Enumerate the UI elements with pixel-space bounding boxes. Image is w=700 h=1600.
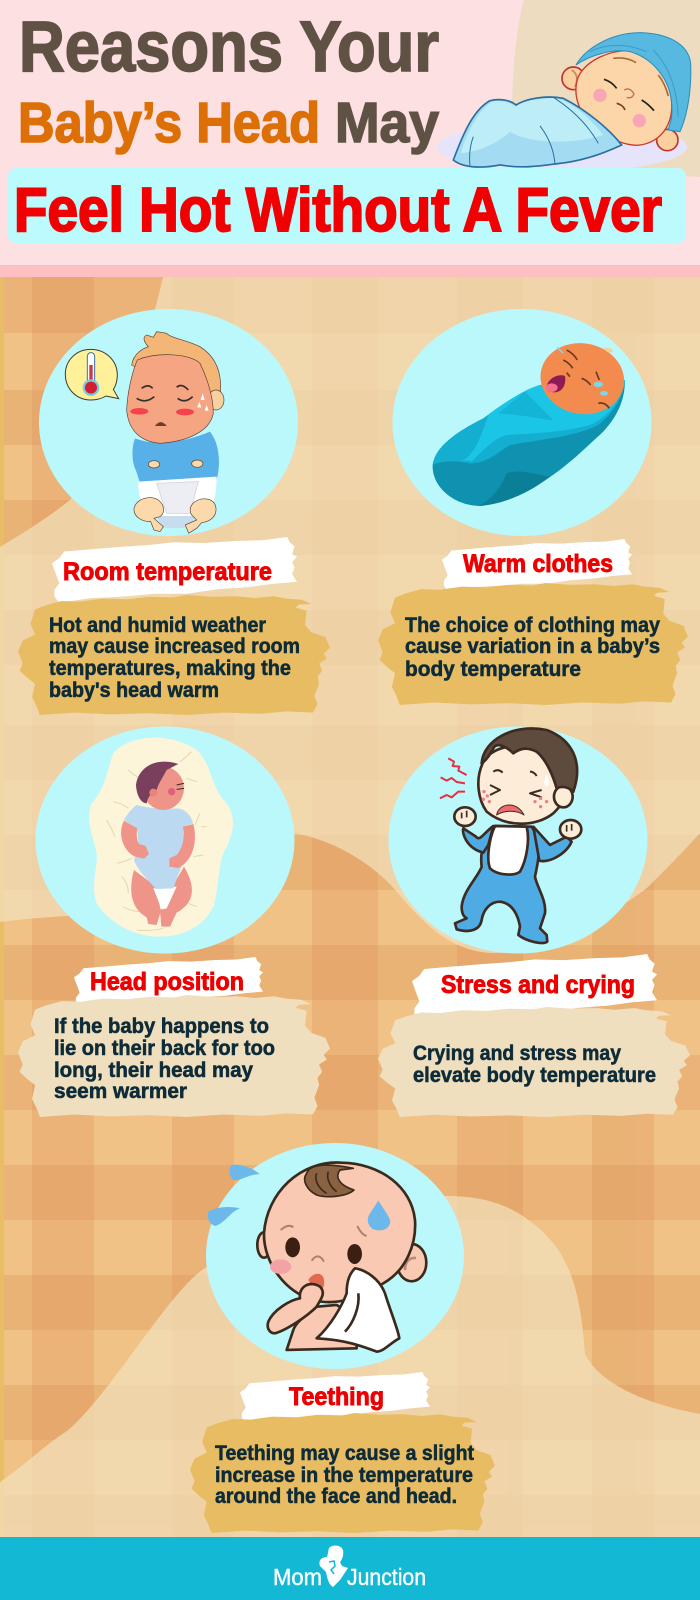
text block: warm clothes: cause variation in a baby’s	[405, 635, 660, 658]
text block: teething: Teething may cause a slight	[215, 1442, 474, 1465]
illustration: baby lying on back	[89, 738, 233, 937]
header background	[0, 0, 700, 277]
circle: stress and crying	[388, 726, 648, 954]
text block: room temperature: temperatures, making the	[49, 657, 291, 680]
illustration: overheated baby with thermometer	[65, 332, 224, 533]
text block: warm clothes	[378, 583, 688, 705]
title line: Reasons Your: Reasons Your	[19, 8, 439, 87]
circle: room temperature	[39, 309, 298, 536]
illustration: crying baby in blue sleepsuit	[440, 729, 581, 943]
title	[18, 8, 439, 155]
text block: head position: long, their head may	[54, 1059, 253, 1082]
circle: warm clothes	[392, 309, 652, 536]
heading: Stress and crying: Stress and crying	[441, 971, 635, 999]
heading: Stress and crying	[412, 954, 657, 1022]
text block: teething: increase in the temperature	[215, 1464, 473, 1487]
panel: room temperature	[18, 309, 330, 715]
heading: Room temperature: Room temperature	[63, 558, 272, 586]
circle: teething	[206, 1143, 464, 1369]
text block: room temperature: may cause increased room	[49, 635, 300, 658]
panel: head position	[18, 726, 330, 1117]
heading: Warm clothes: Warm clothes	[463, 550, 613, 578]
text block: room temperature	[18, 595, 330, 715]
text block: stress and crying: Crying and stress may	[413, 1042, 621, 1065]
illustration: crying swaddled baby	[433, 337, 630, 506]
text block: room temperature: baby's head warm	[49, 679, 219, 702]
subtitle band	[8, 168, 686, 245]
heading: Teething	[240, 1372, 430, 1423]
circle: head position	[36, 726, 294, 954]
text block: head position	[18, 995, 330, 1117]
text block: warm clothes: body temperature	[405, 658, 581, 681]
title line: Baby's Head: Baby’s Head	[18, 91, 320, 155]
panel: warm clothes	[378, 309, 688, 705]
footer	[0, 1537, 700, 1600]
logo: MomJunction: Junction	[347, 1564, 426, 1590]
text block: head position: If the baby happens to	[54, 1015, 269, 1038]
panel: teething	[190, 1143, 495, 1533]
text block: stress and crying: elevate body temperature	[413, 1064, 656, 1087]
text block: teething	[190, 1413, 495, 1533]
heading: Room temperature	[52, 537, 297, 603]
heading: Head position: Head position	[90, 968, 244, 996]
heading: Head position	[74, 957, 263, 1008]
illustration: sleeping swaddled baby	[437, 33, 691, 172]
text block: head position: lie on their back for too	[54, 1037, 275, 1060]
logo: MomJunction: Mom	[273, 1564, 322, 1590]
title word: May: May	[335, 91, 439, 155]
logo: MomJunction	[273, 1546, 426, 1590]
text block: teething: around the face and head.	[215, 1485, 457, 1508]
illustration: teething baby with cloth	[208, 1163, 426, 1352]
text block: stress and crying	[378, 1007, 690, 1117]
heading: Warm clothes	[442, 539, 632, 591]
text block: room temperature: Hot and humid weather	[49, 614, 266, 637]
text block: warm clothes: The choice of clothing may	[405, 614, 660, 637]
plaid background	[0, 277, 700, 1537]
text block: head position: seem warmer	[54, 1080, 187, 1103]
heading: Teething: Teething	[289, 1383, 384, 1411]
panel: stress and crying	[378, 726, 690, 1117]
